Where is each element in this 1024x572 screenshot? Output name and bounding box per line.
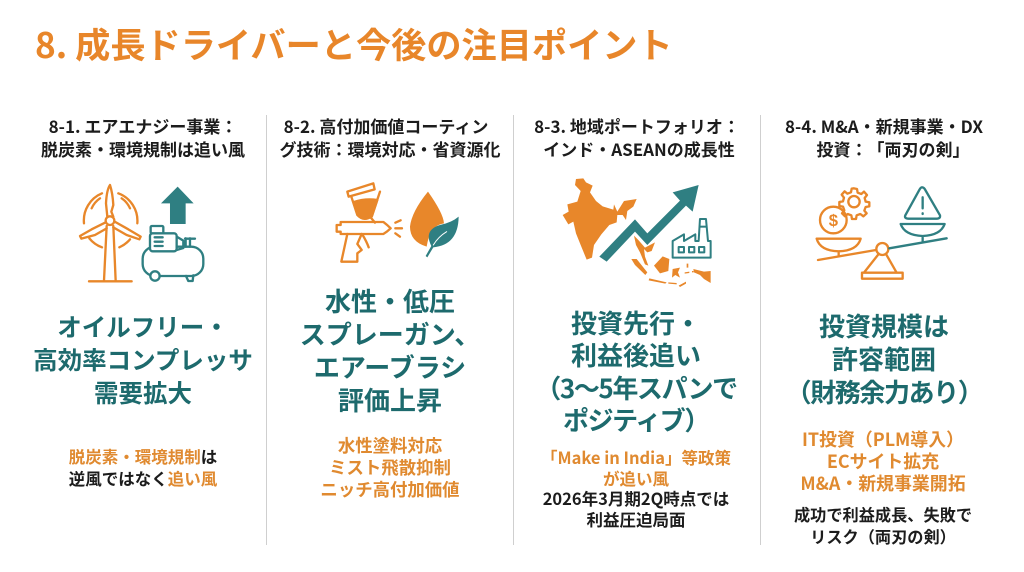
note: 8-3: が追い風: [603, 466, 669, 490]
key message: 8-1: 高効率コンプレッサ: [33, 342, 253, 377]
title: 8. 成長ドライバーと今後の注目ポイント: [35, 18, 673, 69]
heading: 8-3: インド・ASEANの成長性: [543, 136, 735, 160]
note: 8-4: ECサイト拡充: [827, 448, 939, 474]
heading: 8-1: [41, 113, 245, 160]
panel: 8-1 air energy: [33, 113, 253, 490]
key message: 8-2: スプレーガン、: [300, 315, 480, 352]
key message: 8-1: オイルフリー・: [57, 309, 229, 344]
note: 8-3: [541, 445, 731, 530]
icon: wind turbine and compressor: [80, 185, 203, 281]
key message: 8-2: 水性・低圧: [325, 282, 455, 319]
note: 8-2: ニッチ高付加価値: [320, 477, 460, 502]
key message: 8-2: エアーブラシ: [314, 348, 466, 385]
icon: India and ASEAN map with growth arrow and factory: [563, 178, 711, 287]
heading: 8-3: 8-3. 地域ポートフォリオ：: [534, 113, 740, 138]
icon: balance scale with money, gear and warning: [817, 187, 947, 279]
heading: 8-4: [785, 113, 983, 160]
risk note: 8-4: リスク（両刃の剣）: [810, 524, 956, 548]
key message: 8-4: 投資規模は: [819, 307, 949, 344]
key message: 8-3: [535, 304, 737, 438]
note: 8-2: [320, 433, 460, 502]
heading: 8-4: 投資：「両刃の剣」: [816, 136, 970, 160]
heading: 8-2: グ技術：環境対応・省資源化: [280, 136, 500, 160]
key message: 8-4: （財務余力あり）: [786, 373, 982, 410]
icon: balance scale with money, gear and warning: $: [829, 211, 839, 230]
key message: 8-4: [786, 307, 982, 410]
key message: 8-1: [33, 309, 253, 410]
key message: 8-3: 投資先行・: [571, 304, 701, 341]
key message: 8-2: 評価上昇: [338, 381, 442, 418]
key message: 8-2: [300, 282, 480, 418]
heading: 8-3: [534, 113, 740, 160]
note: 8-4: M&A・新規事業開拓: [800, 470, 966, 496]
key message: 8-4: 許容範囲: [832, 340, 936, 377]
risk note: 8-4: 成功で利益成長、失敗で: [794, 502, 972, 526]
note: 8-1: 脱炭素・環境規制は: [69, 444, 217, 468]
heading: 8-2: [280, 113, 500, 160]
note: 8-1: 逆風ではなく追い風: [69, 466, 217, 490]
note: 8-3: 2026年3月期2Q時点では: [543, 486, 729, 510]
heading: 8-1: 脱炭素・環境規制は追い風: [41, 136, 245, 160]
note: 8-2: 水性塗料対応: [338, 433, 442, 458]
key message: 8-3: 利益後追い: [571, 336, 701, 373]
note: 8-2: ミスト飛散抑制: [329, 455, 451, 480]
panel: 8-3 regional portfolio: [534, 113, 740, 530]
heading: 8-1: 8-1. エアエナジー事業：: [49, 113, 237, 138]
key message: 8-3: ポジティブ）: [563, 401, 709, 438]
panel: 8-2 coating: [280, 113, 500, 502]
note: 8-3: 利益圧迫局面: [586, 506, 686, 530]
key message: 8-1: 需要拡大: [94, 375, 192, 410]
risk note: 8-4: [794, 502, 972, 548]
note: 8-3: 「Make in India」等政策: [541, 445, 731, 469]
note: 8-4: IT投資（PLM導入）: [802, 426, 964, 452]
panel: 8-4 M&A and DX: [785, 113, 983, 548]
key message: 8-3: （3～5年スパンで: [535, 369, 737, 406]
icon: spray gun and water drop with leaf: [337, 183, 459, 262]
note: 8-1: [69, 444, 217, 490]
heading: 8-4: 8-4. M&A・新規事業・DX: [785, 113, 983, 138]
heading: 8-2: 8-2. 高付加価値コーティン: [284, 113, 488, 138]
note: 8-4: [800, 426, 966, 496]
